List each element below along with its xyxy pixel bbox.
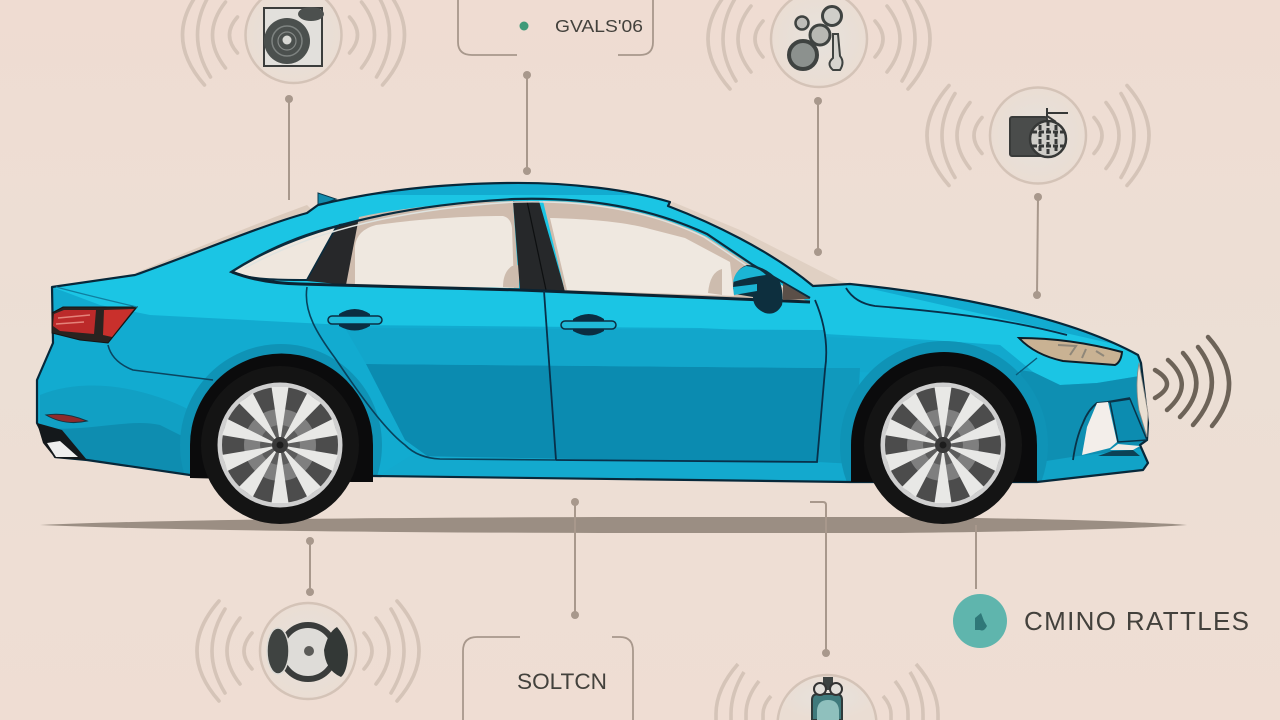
rear wheel arch shading xyxy=(180,344,382,475)
spoiler fin xyxy=(318,193,336,206)
icon: globe and panel xyxy=(927,86,1149,186)
fog lamp surround line xyxy=(1073,398,1130,460)
connector: top left icon to car xyxy=(285,95,293,200)
lower grille xyxy=(1110,399,1147,442)
rear reflector xyxy=(46,414,87,423)
label box: bottom: SOLTCN xyxy=(517,669,607,694)
rear door glass xyxy=(355,216,514,288)
front door line xyxy=(556,300,826,462)
hood crease xyxy=(846,288,1067,335)
rear wheel arch xyxy=(190,354,373,482)
trunk line xyxy=(56,287,137,307)
rocker panel xyxy=(428,456,594,460)
connector: teal badge xyxy=(975,525,977,589)
connector: right icon to hood xyxy=(1033,193,1042,299)
connector: top label to car xyxy=(523,71,531,175)
icon: bottle xyxy=(716,664,938,720)
front door window frame xyxy=(543,201,808,302)
icon: gears xyxy=(708,0,930,89)
rear door handle xyxy=(328,309,382,330)
side mirror xyxy=(733,265,810,314)
rear quarter mid shading xyxy=(40,386,186,435)
door lower shading xyxy=(366,364,825,462)
headlight xyxy=(1019,338,1122,365)
fender lower shading xyxy=(817,368,860,464)
rear door window frame xyxy=(346,201,519,288)
front seat xyxy=(708,269,722,295)
front wheel arch xyxy=(851,352,1037,482)
front wheel xyxy=(864,366,1022,524)
body outline xyxy=(37,183,1148,482)
fog lamp opening xyxy=(1082,402,1117,455)
rear quarter window xyxy=(231,226,337,280)
connector: lower left icon xyxy=(306,537,314,596)
rear diffuser xyxy=(37,423,87,460)
tail light xyxy=(52,307,137,343)
windshield strip xyxy=(668,202,851,288)
rear door shut line xyxy=(306,287,556,460)
B pillar xyxy=(513,201,565,291)
fender mid shading xyxy=(1008,352,1028,368)
connector: lower label xyxy=(571,498,579,619)
window top chrome line xyxy=(233,199,810,298)
window sill line xyxy=(232,272,810,302)
label box: top: GVALS'06 xyxy=(555,16,643,36)
door mid shading xyxy=(734,330,824,334)
rear panel line xyxy=(108,345,213,380)
front door glass xyxy=(550,218,734,296)
front door handle xyxy=(561,314,616,336)
bright upper shading xyxy=(52,195,1146,385)
sound waves at front of car xyxy=(1155,337,1229,426)
rear wheel xyxy=(201,366,359,524)
bumper lower lip xyxy=(1042,449,1146,480)
rear lower dark shading xyxy=(58,423,184,473)
label box: top xyxy=(458,0,653,55)
rear seat xyxy=(503,265,519,288)
bumper slot xyxy=(1110,444,1140,450)
ground shadow xyxy=(40,517,1187,533)
front wheel arch shading xyxy=(842,341,1046,481)
C pillar xyxy=(307,221,359,285)
rear window trim strip xyxy=(135,205,314,277)
car body xyxy=(38,184,1147,481)
teal badge and label: CMINO RATTLES xyxy=(1024,606,1249,636)
center door line xyxy=(544,291,556,460)
icon: brake disc xyxy=(197,601,419,701)
label box: bottom xyxy=(463,637,633,720)
connector: bottle icon xyxy=(810,502,830,657)
connector: gears icon to car xyxy=(814,97,822,256)
car xyxy=(30,175,1160,549)
front bumper dark shading xyxy=(1020,370,1146,461)
fender seam xyxy=(1016,358,1037,375)
teal badge and label xyxy=(953,594,1249,648)
nose emblem xyxy=(1137,363,1148,437)
icon: top left coil xyxy=(182,0,404,85)
